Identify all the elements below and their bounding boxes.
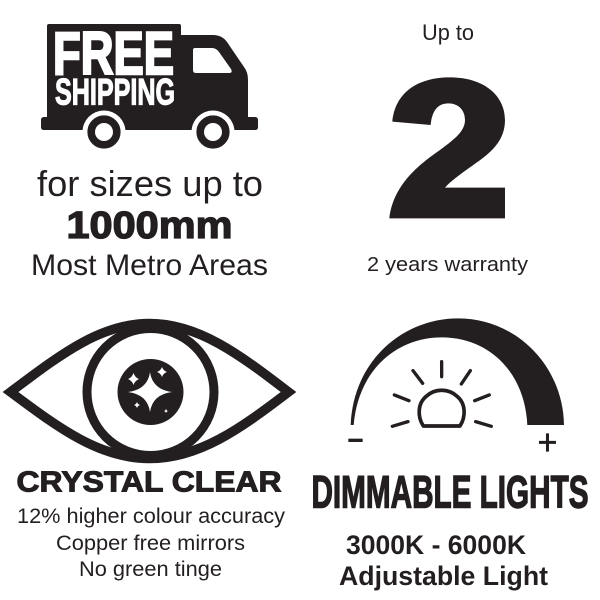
icon: minus xyxy=(348,439,363,442)
text: most metro areas: Most Metro Areas xyxy=(31,249,268,282)
icon: eye xyxy=(10,324,288,458)
truck label: shipping: SHIPPING xyxy=(55,72,175,112)
panel: free shipping xyxy=(31,20,268,282)
icon: delivery truck xyxy=(41,20,258,154)
text: no green tinge: No green tinge xyxy=(79,556,222,581)
text: colour temperature range: 3000K - 6000K xyxy=(346,530,526,560)
heading: crystal clear: CRYSTAL CLEAR xyxy=(16,466,282,498)
text: for sizes up to: for sizes up to xyxy=(37,163,263,204)
text: up to: Up to xyxy=(422,20,474,45)
panel: dimmable lights xyxy=(312,318,588,591)
panel: crystal clear xyxy=(10,324,288,581)
text: colour accuracy: 12% higher colour accuracy xyxy=(17,503,285,528)
text: 2 years warranty: 2 years warranty xyxy=(367,254,529,276)
icon: plus xyxy=(539,433,556,452)
truck label: free: FREE xyxy=(53,20,174,87)
text: copper free mirrors: Copper free mirrors xyxy=(56,530,245,555)
panel: warranty xyxy=(367,20,529,276)
icon: dimmer arc with bulb xyxy=(348,318,564,452)
text: adjustable light: Adjustable Light xyxy=(339,561,548,591)
icon: large numeral 2 xyxy=(389,77,505,218)
text: 1000mm: 1000mm xyxy=(66,205,232,247)
